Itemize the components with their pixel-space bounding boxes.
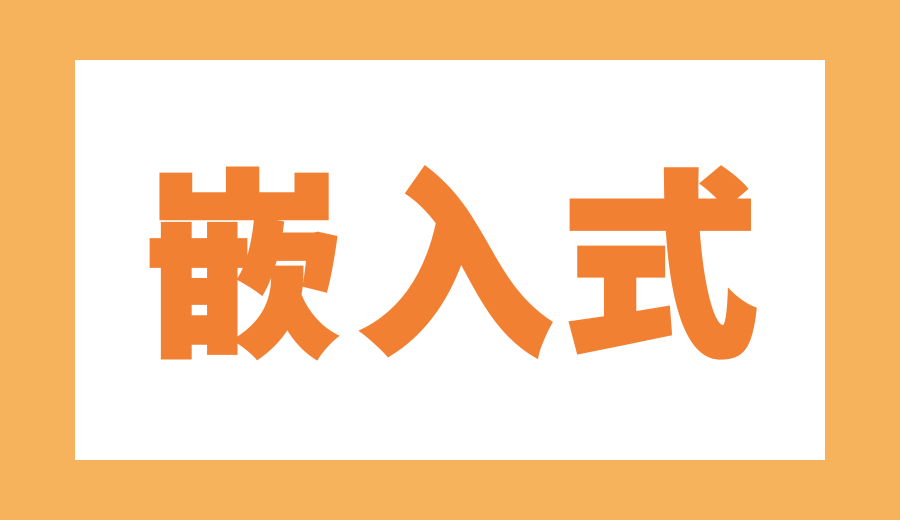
title: 嵌入式: 嵌 <box>145 158 341 381</box>
title: 嵌入式: 入 <box>357 158 553 381</box>
title: 嵌入式: 式 <box>562 158 758 381</box>
panel: white central card <box>75 60 825 460</box>
